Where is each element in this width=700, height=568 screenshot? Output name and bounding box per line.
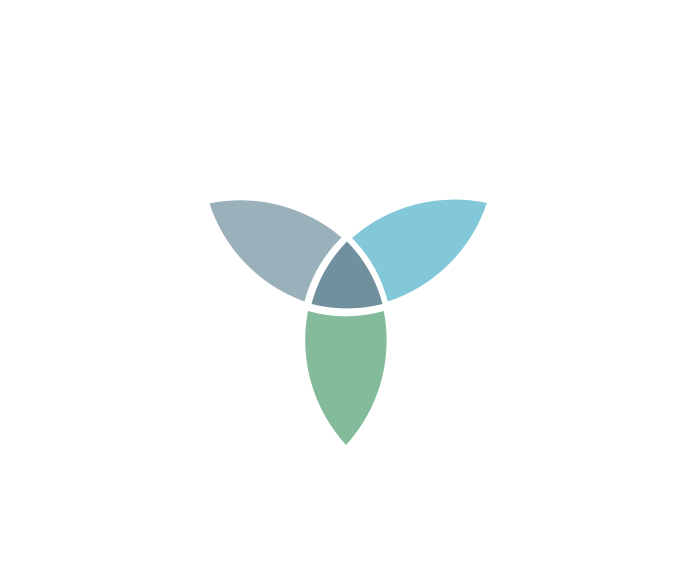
petal: upper left (210, 200, 342, 302)
petal: center (312, 242, 382, 308)
petal: upper right (352, 200, 487, 302)
petal: bottom (305, 311, 387, 445)
